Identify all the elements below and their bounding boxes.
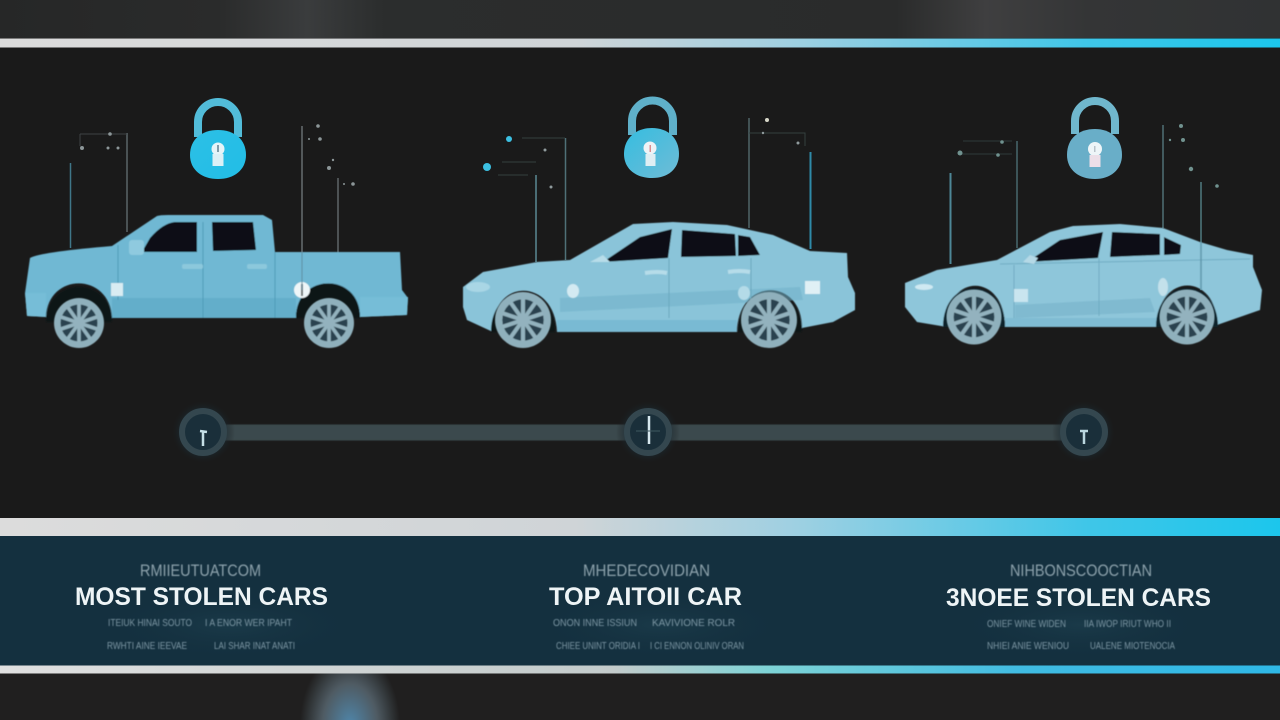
icon: padlock 3: [1067, 101, 1122, 179]
door seams and handles: [118, 222, 275, 318]
text block: stolen cars: [946, 561, 1211, 652]
text block: stolen cars: IIA IWOP IRIUT WHO II: [1084, 619, 1171, 630]
truck windows: [142, 222, 197, 252]
timeline node 2: [616, 400, 680, 464]
truck body: [25, 215, 408, 322]
text block: stolen cars: NHIEI ANIE WENIOU: [987, 641, 1069, 652]
middle gradient bar: [0, 518, 1280, 536]
callout lines: sedan: [483, 118, 810, 262]
text block: top car: [549, 561, 744, 652]
timeline node 1: [171, 400, 235, 464]
bottom gradient bar: [0, 666, 1280, 674]
truck wheels: [54, 298, 354, 348]
text block: most stolen cars: I A ENOR WER IPAHT: [205, 618, 292, 629]
text block: stolen cars: 3NOEE STOLEN CARS: [946, 584, 1211, 612]
text block: top car: CHIEE UNINT ORIDIA I: [556, 641, 640, 652]
text block: top car: ONON INNE ISSIUN: [553, 618, 637, 629]
bottom glow: [300, 674, 400, 720]
lower panel background: [0, 536, 1280, 666]
sedan windows: [603, 229, 672, 262]
bottom strip: [0, 674, 1280, 720]
seams, handles, highlights: [669, 258, 751, 318]
top gradient bar: [0, 38, 1280, 48]
icon: padlock 2: [624, 101, 679, 178]
text block: most stolen cars: [75, 561, 328, 652]
wheel arches: [491, 293, 555, 332]
compact sedan wheels: [946, 290, 1214, 344]
top strip: [0, 0, 1280, 38]
wheel arches: [46, 287, 112, 322]
text block: stolen cars: NIHBONSCOOCTIAN: [1010, 561, 1152, 580]
text block: top car: I CI ENNON OLINIV ORAN: [650, 641, 744, 652]
icon: padlock 1: [190, 102, 246, 179]
panel: compact sedan: [905, 101, 1262, 344]
wheel arches: [943, 288, 1005, 327]
text block: top car: MHEDECOVIDIAN: [583, 561, 710, 580]
compact sedan windows: [1027, 232, 1103, 262]
callout lines: truck: [70, 124, 355, 254]
timeline: [171, 400, 1116, 464]
timeline track: [222, 424, 1064, 440]
text block: most stolen cars: ITEIUK HINAI SOUTO: [108, 618, 192, 629]
text block: stolen cars: ONIEF WINE WIDEN: [987, 619, 1066, 630]
callout lines: compact sedan: [950, 124, 1219, 290]
text block: most stolen cars: RWHTI AINE IEEVAE: [107, 641, 187, 652]
text block: most stolen cars: RMIIEUTUATCOM: [140, 561, 261, 580]
seams, handles, highlights: [1000, 258, 1250, 318]
text block: stolen cars: UALENE MIOTENOCIA: [1090, 641, 1175, 652]
sedan body: [463, 222, 855, 332]
compact sedan body: [905, 224, 1262, 327]
sedan wheels: [495, 292, 797, 348]
panel: sedan: [463, 101, 855, 348]
timeline node 3: [1052, 400, 1116, 464]
text block: most stolen cars: MOST STOLEN CARS: [75, 583, 328, 611]
panel: pickup truck: [25, 102, 408, 348]
text block: top car: TOP AITOII CAR: [549, 583, 742, 611]
text block: top car: KAVIVIONE ROLR: [652, 618, 735, 629]
text block: most stolen cars: LAI SHAR INAT ANATI: [214, 641, 295, 652]
